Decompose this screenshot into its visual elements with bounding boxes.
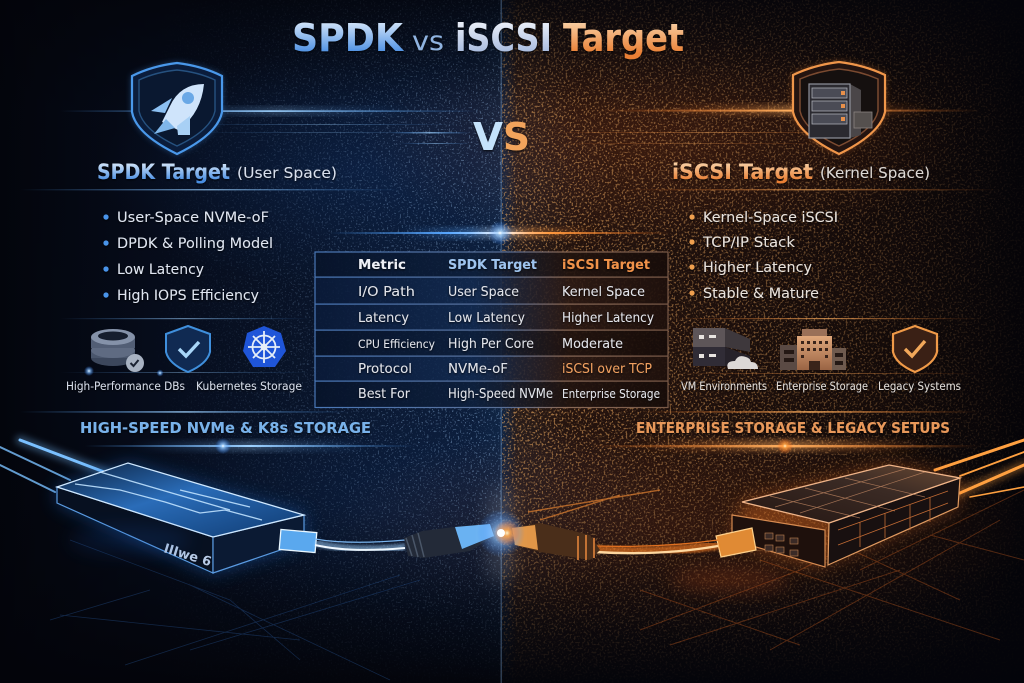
title: iSCSI xyxy=(455,16,552,60)
icon: server shield xyxy=(793,62,885,154)
blue NVMe device: IIIwe 6 xyxy=(162,541,213,570)
table rows: CPU Efficiency xyxy=(358,337,435,351)
feature list: SPDK xyxy=(103,210,273,304)
icon labels: SPDK xyxy=(66,379,302,393)
icon: check shield xyxy=(166,326,210,372)
title: vs xyxy=(412,26,444,57)
table rows: I/O Path xyxy=(358,284,415,300)
heading: SPDK target xyxy=(97,160,337,184)
heading: iSCSI target xyxy=(672,160,930,184)
banner: SPDK use: HIGH-SPEED NVMe & K8s STORAGE xyxy=(80,419,371,437)
table header xyxy=(358,257,651,273)
icon: VM servers with cloud xyxy=(693,328,758,369)
table rows: Protocol xyxy=(358,361,412,377)
heading: iSCSI target: iSCSI Target xyxy=(672,160,813,184)
icon labels: SPDK: High-Performance DBs xyxy=(66,379,185,393)
table rows: Low Latency xyxy=(448,310,525,326)
table rows xyxy=(358,284,660,402)
title: SPDK xyxy=(292,16,404,60)
icon: kubernetes xyxy=(243,326,286,367)
icon: enterprise building xyxy=(780,329,846,370)
table rows: Enterprise Storage xyxy=(562,387,660,401)
VS badge: V xyxy=(473,115,504,159)
feature list: SPDK: High IOPS Efficiency xyxy=(117,288,259,304)
orange server device xyxy=(512,440,1024,592)
table rows: Higher Latency xyxy=(562,310,654,326)
feature list: SPDK: Low Latency xyxy=(117,262,204,278)
feature list: SPDK: DPDK & Polling Model xyxy=(117,236,273,252)
banner: iSCSI use: ENTERPRISE STORAGE & LEGACY SETUPS xyxy=(636,419,950,437)
icon: rocket shield xyxy=(132,63,222,154)
feature list: iSCSI: Kernel-Space iSCSI xyxy=(703,210,838,226)
feature list: iSCSI xyxy=(689,210,838,302)
table rows: User Space xyxy=(448,284,519,300)
heading: iSCSI target: (Kernel Space) xyxy=(820,164,930,182)
title: Target xyxy=(563,16,684,60)
table rows: Latency xyxy=(358,310,409,326)
table header: Metric xyxy=(358,257,406,273)
icon: database xyxy=(91,329,144,372)
feature list: iSCSI: Stable & Mature xyxy=(703,286,819,302)
table rows: High-Speed NVMe xyxy=(448,386,553,402)
VS badge xyxy=(473,115,530,159)
panel: iSCSI target xyxy=(620,160,1000,437)
heading: SPDK target: SPDK Target xyxy=(97,160,230,184)
panel: SPDK target xyxy=(20,160,400,437)
icon labels: iSCSI: VM Environments xyxy=(681,379,767,393)
table rows: iSCSI over TCP xyxy=(562,361,652,377)
feature list: SPDK: User-Space NVMe-oF xyxy=(117,210,269,226)
table header: SPDK Target xyxy=(448,257,538,273)
icon: legacy shield xyxy=(893,326,937,372)
table header: iSCSI Target xyxy=(562,257,651,273)
heading: SPDK target: (User Space) xyxy=(237,164,337,182)
floor grid: orange side xyxy=(640,490,1024,650)
title xyxy=(292,16,684,60)
blue NVMe device xyxy=(0,440,494,573)
floor grid: blue side xyxy=(50,540,420,680)
feature list: iSCSI: Higher Latency xyxy=(703,260,812,276)
table rows: High Per Core xyxy=(448,336,534,352)
center flare xyxy=(477,490,525,580)
feature list: iSCSI: TCP/IP Stack xyxy=(702,235,796,251)
table rows: NVMe-oF xyxy=(448,361,508,377)
VS badge: S xyxy=(503,115,530,159)
icon labels: iSCSI: Legacy Systems xyxy=(878,379,961,393)
icon labels: iSCSI: Enterprise Storage xyxy=(776,379,868,393)
horizontal light streaks xyxy=(60,106,980,454)
table rows: Moderate xyxy=(562,336,623,352)
table rows: Kernel Space xyxy=(562,284,645,300)
comparison table xyxy=(315,252,668,408)
table rows: Best For xyxy=(358,386,410,402)
icon labels: iSCSI xyxy=(681,379,961,393)
icon labels: SPDK: Kubernetes Storage xyxy=(196,379,302,393)
